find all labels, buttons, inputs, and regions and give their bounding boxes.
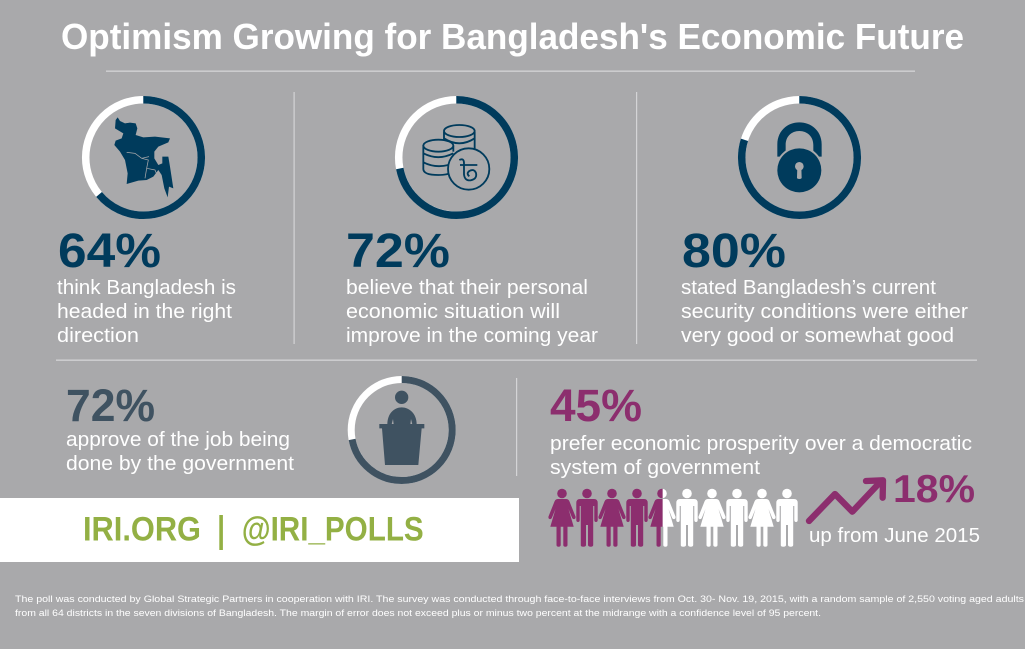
icon: padlock <box>775 122 823 194</box>
stat: 64%: 64% <box>58 225 161 278</box>
text: prosperity preference: prefer economic prosperity over a democratic <box>550 433 972 455</box>
text: personal economy: economic situation will <box>346 301 560 323</box>
banner: website and handle: @IRI_POLLS <box>242 511 424 549</box>
banner: website and handle <box>0 498 519 562</box>
panel: security 80% <box>681 100 968 347</box>
pictogram: ten people, 45 percent filled <box>548 489 798 547</box>
panel: personal economy 72% <box>346 100 598 347</box>
text: government approval <box>66 429 294 475</box>
panel: government approval 72% <box>66 380 452 480</box>
panel: right direction 64% <box>57 100 236 347</box>
text: security: stated Bangladesh’s current <box>681 277 936 299</box>
text: personal economy <box>346 277 598 347</box>
stat: 72% approval: 72% <box>66 380 155 431</box>
ring: 72 percent <box>399 100 514 215</box>
text: prosperity preference: system of government <box>550 457 760 479</box>
text: personal economy: believe that their personal <box>346 277 588 299</box>
arrow: rising trend <box>809 480 883 521</box>
text: security: very good or somewhat good <box>681 325 954 347</box>
icon: speaker at podium <box>379 391 424 465</box>
icon: coins with taka <box>423 125 489 190</box>
banner: website and handle: IRI.ORG <box>83 511 201 549</box>
text: right direction: direction <box>57 325 139 347</box>
text: prosperity preference <box>550 433 972 479</box>
stat: 80%: 80% <box>682 225 786 278</box>
stat: 45%: 45% <box>550 380 642 431</box>
footnote: The poll was conducted by Global Strategic Partners in cooperation with IRI. The survey was conducted through face-to-face interviews from Oct. 30- Nov. 19, 2015, with a random sample of 2,550 voting aged adults <box>15 593 1024 604</box>
text: government approval: done by the government <box>66 453 294 475</box>
text: security: security conditions were either <box>681 301 968 323</box>
footnote <box>15 593 1024 618</box>
text: government approval: approve of the job being <box>66 429 290 451</box>
text: personal economy: improve in the coming year <box>346 325 598 347</box>
ring: 72 percent approval <box>351 380 452 480</box>
text: up from June 2015: up from June 2015 <box>809 525 980 547</box>
icon: Bangladesh map <box>114 117 173 197</box>
title: Optimism Growing for Bangladesh's Economic Future <box>61 16 964 57</box>
text: right direction: think Bangladesh is <box>57 277 236 299</box>
ring: 80 percent <box>742 100 857 215</box>
ring: 64 percent <box>86 100 201 215</box>
stat: 72%: 72% <box>346 225 450 278</box>
text: right direction <box>57 277 236 347</box>
footnote: from all 64 districts in the seven divisions of Bangladesh. The margin of error does not exceed plus or minus two percent at the midrange with a confidence level of 95 percent. <box>15 607 821 618</box>
stat: 18%: 18% <box>893 468 975 511</box>
panel: prosperity over democracy 45% <box>548 380 980 547</box>
text: security <box>681 277 968 347</box>
text: right direction: headed in the right <box>57 301 232 323</box>
